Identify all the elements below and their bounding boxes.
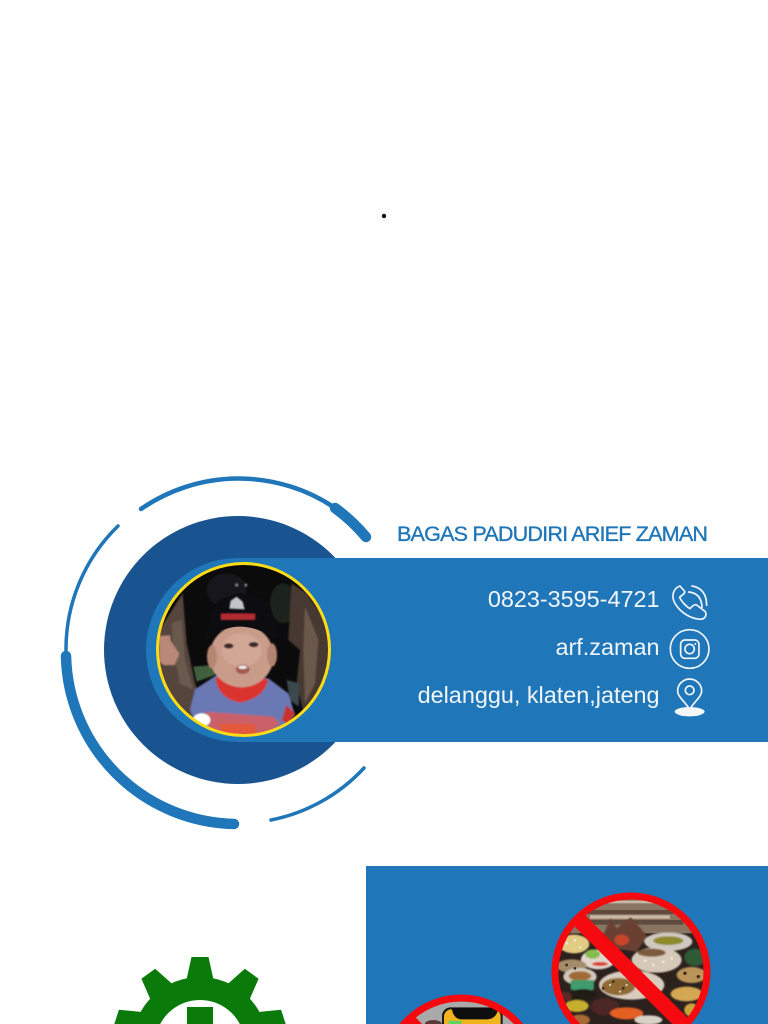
decorative ring arcs around profile — [66, 479, 366, 824]
icon: phone — [673, 586, 707, 619]
address: delanggu, klaten,jateng — [418, 682, 660, 708]
icon: location pin — [675, 679, 705, 716]
page canvas — [60, 214, 768, 1024]
name heading: BAGAS PADUDIRI ARIEF ZAMAN — [397, 521, 708, 546]
small dot at top of page — [382, 214, 386, 218]
icon: instagram — [670, 630, 709, 668]
panel: blue lower right — [366, 866, 768, 1024]
hat — [216, 592, 274, 632]
image: phone with prohibition sign — [400, 994, 524, 1024]
logo: green gear — [112, 957, 288, 1024]
image: food with prohibition sign — [550, 893, 713, 1024]
instagram handle: arf.zaman — [555, 634, 660, 660]
blue contact band — [146, 558, 768, 742]
dark blue circle behind photo — [104, 516, 372, 784]
phone number: 0823-3595-4721 — [488, 586, 660, 612]
profile photo — [153, 560, 333, 740]
